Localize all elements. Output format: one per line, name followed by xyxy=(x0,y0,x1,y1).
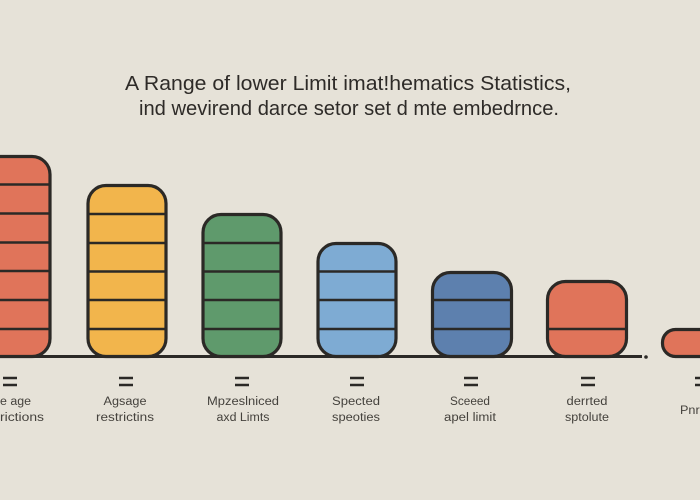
equals sign 3 xyxy=(235,378,249,385)
bar 4: light blue xyxy=(318,244,396,356)
bar 1: red xyxy=(0,156,50,356)
label 3: Mpzeslniced xyxy=(207,396,279,408)
label 6: sptolute xyxy=(565,412,609,424)
bar 2: yellow xyxy=(88,186,166,356)
baseline xyxy=(0,355,648,359)
label 1: rictions xyxy=(0,412,44,424)
title: ind wevirend darce setor set d mte embedrnce. xyxy=(139,97,559,120)
equals sign 1 xyxy=(3,378,17,385)
label 6: derrted xyxy=(566,396,608,408)
label 4: Spected xyxy=(332,396,380,408)
equals sign 4 xyxy=(350,378,364,385)
equals sign 6 xyxy=(581,378,595,385)
label 7 xyxy=(680,378,700,417)
bar 7: red xyxy=(662,330,700,356)
label 3: axd Limts xyxy=(216,412,270,424)
label 5: Sceeed xyxy=(450,396,490,408)
label 1 xyxy=(0,378,44,424)
label 4 xyxy=(332,378,380,424)
label 2: restrictins xyxy=(96,412,154,424)
label 2 xyxy=(96,378,154,424)
label 4: speoties xyxy=(332,412,380,424)
title: A Range of lower Limit imat!hematics Statistics, xyxy=(125,72,571,95)
equals sign 5 xyxy=(464,378,478,385)
bar 3: green xyxy=(203,214,281,356)
bar chart xyxy=(0,156,700,359)
bar 6: red xyxy=(548,282,626,356)
equals sign 7 xyxy=(695,378,700,385)
title xyxy=(125,72,571,120)
label 2: Agsage xyxy=(104,396,146,408)
label 3 xyxy=(207,378,279,424)
label 1: e age xyxy=(0,396,31,408)
equals sign 2 xyxy=(119,378,133,385)
label 6 xyxy=(565,378,609,424)
label 5 xyxy=(444,378,497,424)
label 5: apel limit xyxy=(444,412,497,424)
bar 5: dark blue xyxy=(432,272,512,356)
